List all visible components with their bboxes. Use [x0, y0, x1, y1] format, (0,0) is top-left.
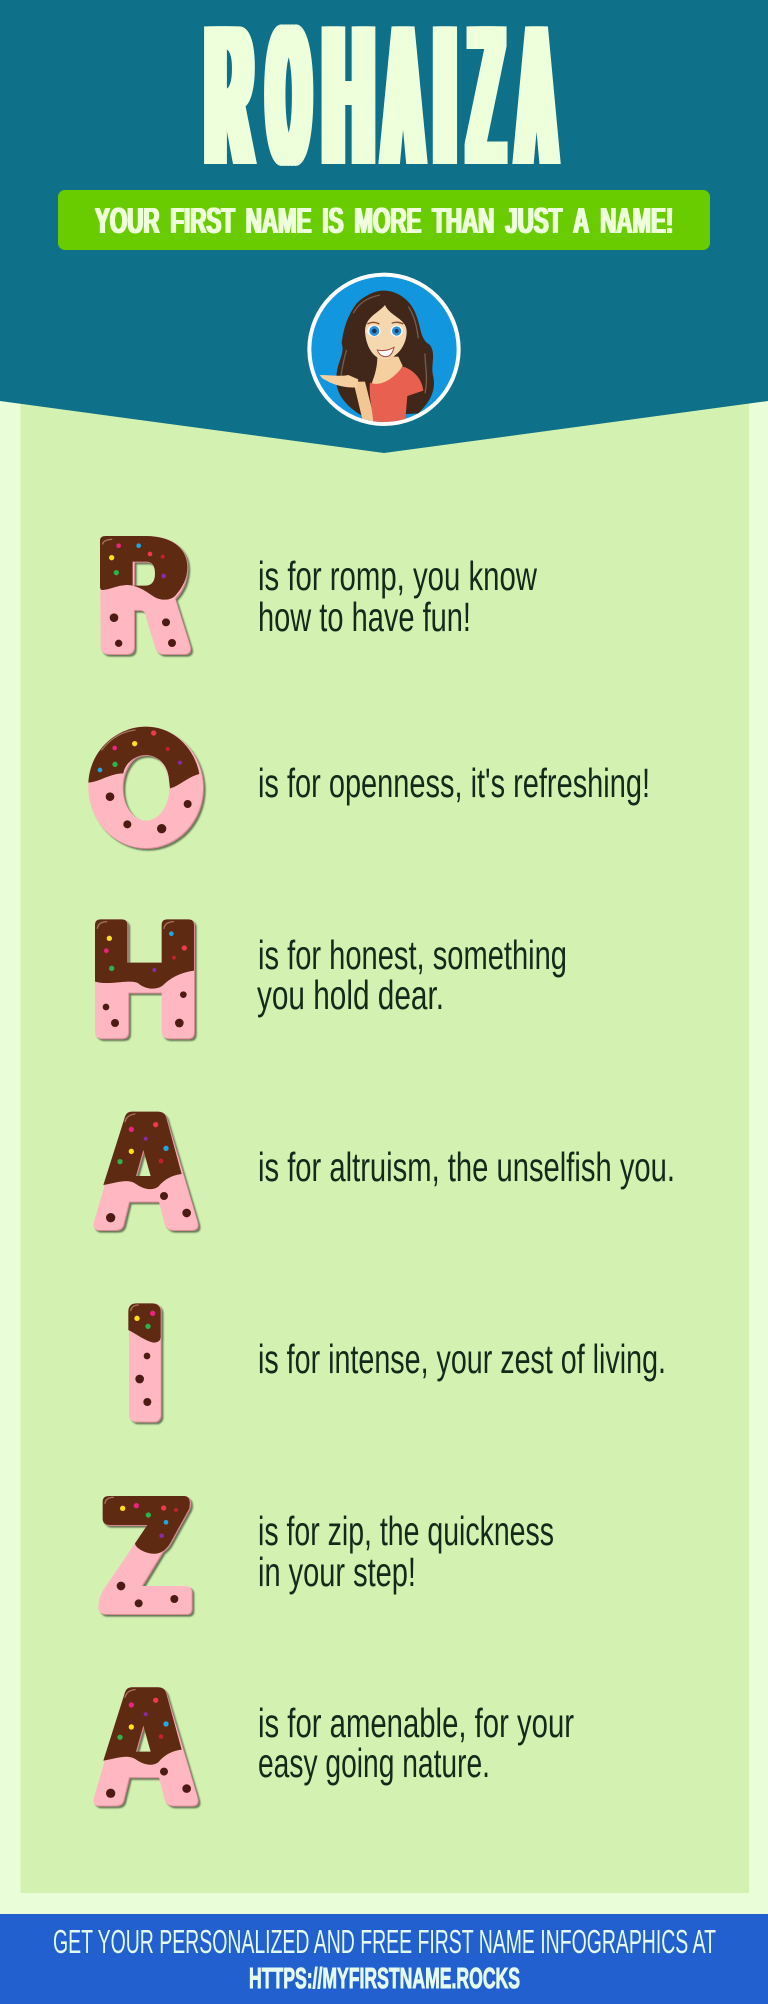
- text: R meaning: is for romp, you know: [258, 553, 537, 599]
- text: H meaning: you hold dear.: [257, 972, 444, 1018]
- panel: main light green: [20, 380, 749, 1893]
- letter R illustration: [100, 536, 190, 654]
- banner: green tagline: YOUR FIRST NAME IS MORE THAN JUST A NAME!: [95, 200, 673, 240]
- footer text line 2: url: HTTPS://MYFIRSTNAME.ROCKS: [249, 1963, 520, 1995]
- footer band: [0, 1914, 768, 2004]
- letter Z illustration: [98, 1496, 192, 1614]
- text: second A meaning: [258, 1700, 574, 1786]
- text: R meaning: how to have fun!: [258, 594, 471, 640]
- title: [204, 0, 561, 207]
- letter A illustration: [93, 1112, 198, 1230]
- text: R meaning: [258, 553, 537, 640]
- text: Z meaning: is for zip, the quickness: [258, 1508, 554, 1554]
- text: second A meaning: is for amenable, for your: [258, 1700, 574, 1746]
- letter H illustration: [95, 919, 194, 1038]
- banner: green tagline: [58, 190, 710, 250]
- letter A illustration (second): [93, 1687, 198, 1806]
- header: teal chevron background: [0, 0, 768, 453]
- text: second A meaning: easy going nature.: [258, 1740, 490, 1786]
- icon: woman avatar in circle: [307, 273, 461, 426]
- text: Z meaning: [258, 1508, 554, 1595]
- text: H meaning: [257, 932, 567, 1018]
- letter O illustration: [88, 727, 203, 848]
- text: H meaning: is for honest, something: [258, 932, 567, 978]
- letter I illustration: [128, 1303, 161, 1422]
- text: Z meaning: in your step!: [258, 1549, 416, 1595]
